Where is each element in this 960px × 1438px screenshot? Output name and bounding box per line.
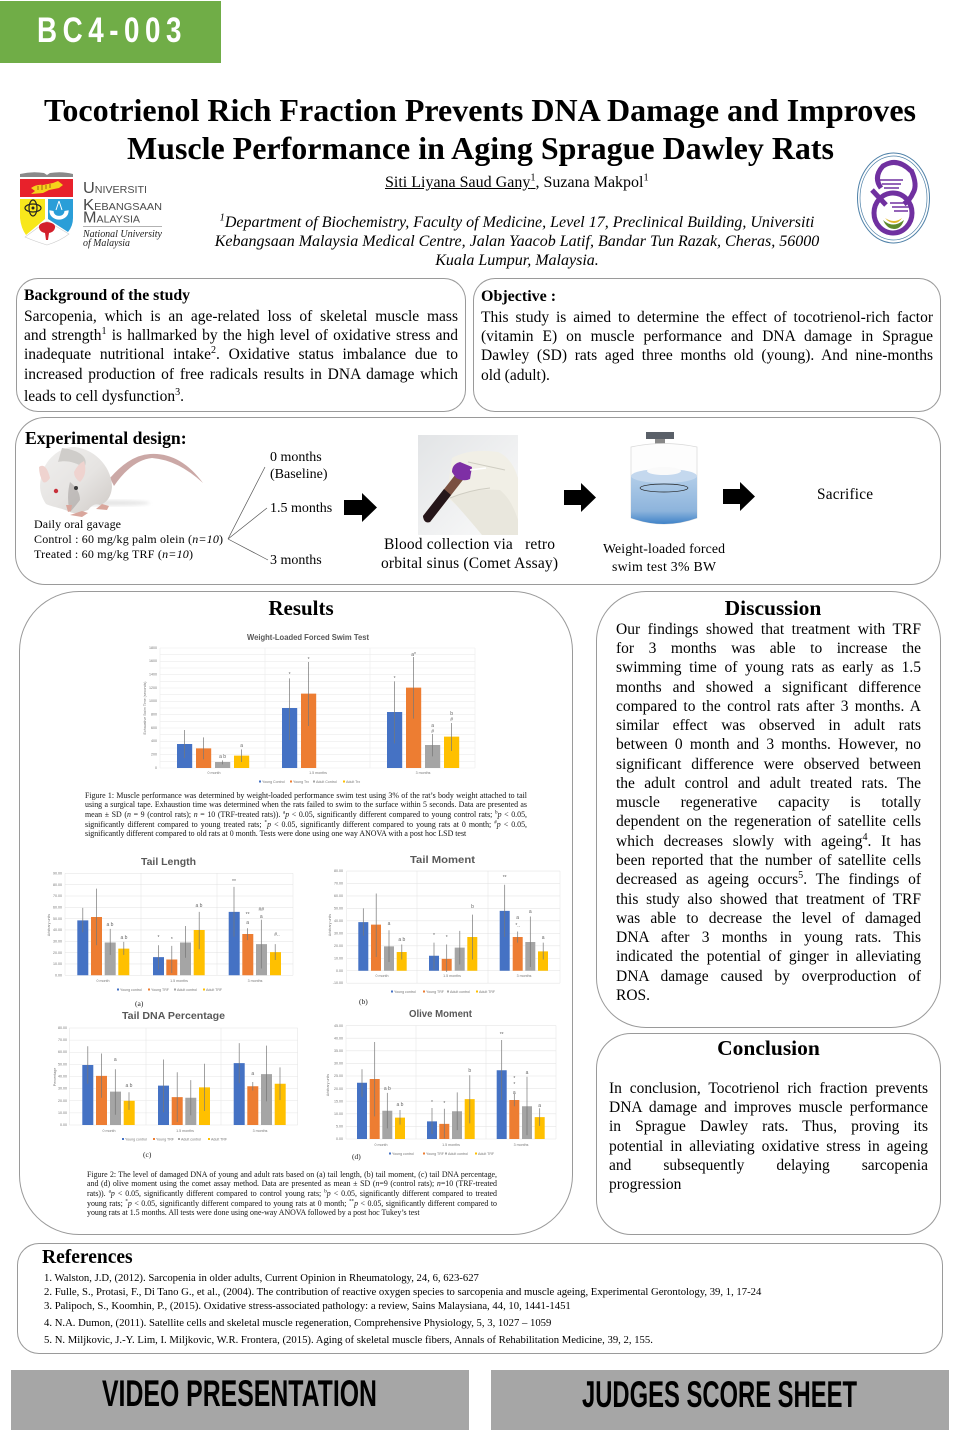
bar chart: tail moment: Tail Moment (410, 854, 476, 866)
bar chart: tail length: Young TRF (151, 988, 170, 992)
bar chart: weight-loaded forced swim test: * (394, 676, 396, 682)
bar chart: tail length: a b (196, 903, 203, 909)
bar chart: tail moment: a b (398, 937, 405, 943)
text: blood collection caption (381, 536, 558, 572)
bar chart: olive moment: a (513, 1090, 516, 1096)
text: discussion paragraph: dependent on the regeneration of satellite cells (616, 813, 921, 830)
text: background paragraph: Sarcopenia, which is an age-related loss of skeletal muscle mass (24, 308, 458, 325)
text: conclusion paragraph: In conclusion, Tocotrienol rich fraction prevents (609, 1080, 928, 1097)
text: conclusion paragraph: progression (609, 1176, 681, 1193)
bar chart: weight-loaded forced swim test: Young Control (262, 780, 285, 784)
panel: conclusion (596, 1033, 941, 1235)
heading: conclusion: Conclusion (717, 1036, 820, 1060)
text: discussion paragraph: for 3 months was able to increase the (616, 640, 921, 657)
icon: white rat (39, 447, 203, 517)
text: conclusion paragraph: DNA damage and improves muscle performance (609, 1099, 928, 1116)
logo: society emblem (857, 152, 930, 244)
bar chart: tail length: 3 months (248, 979, 263, 983)
text: discussion paragraph: DNA after 3 months in young rats. This (616, 929, 921, 946)
bar chart: tail moment: -10.00 (333, 981, 343, 985)
image: blood collection tube in gloved hand (418, 435, 518, 535)
bar chart: olive moment: 5.00 (336, 1124, 343, 1128)
panel: experimental design (15, 417, 941, 585)
bar chart: olive moment: * (443, 1101, 445, 1107)
text: gavage groups (34, 517, 223, 561)
text: objective paragraph: (vitamin E) on muscle performance and DNA damage in Sprague (481, 328, 933, 345)
button: video presentation (11, 1370, 469, 1430)
text: discussion paragraph: was able to decrease the level of damaged (616, 910, 921, 927)
bar chart: tail moment: (b) (359, 997, 368, 1006)
bar chart: olive moment: * (513, 1076, 515, 1082)
text: time points (270, 450, 332, 568)
bar chart: tail moment: a (516, 915, 519, 921)
bar chart: weight-loaded forced swim test: Adult Control (316, 780, 337, 784)
bar chart: weight-loaded forced swim test: 600 (151, 726, 157, 730)
arrow 2 (564, 483, 596, 512)
bar chart: tail length: Tail Length (141, 856, 196, 868)
caption: figure 1: significantly different compared to young treated rats; *p < 0.05, significantly different compared to young rats at 0 month; #p < 0.05, (85, 819, 527, 829)
bar chart: olive moment: 15.00 (334, 1100, 343, 1104)
bar chart: olive moment: a b (384, 1086, 391, 1092)
bar chart: olive moment: a (526, 1070, 529, 1076)
bar chart: tail moment: Arbitrary units (328, 914, 332, 936)
bar chart: tail DNA percentage: Young control (125, 1138, 147, 1142)
bar chart: weight-loaded forced swim test: a (431, 723, 434, 729)
text: background paragraph: and strength1 is hallmarked by the high level of oxidative stress and (24, 326, 458, 344)
caption: figure 2: young rats at 1.5 months. All tests were done using one-way ANOVA followed by a post hoc Tukey’s test (87, 1208, 420, 1217)
caption: figure 2 (87, 1170, 497, 1217)
bar chart: weight-loaded forced swim test (143, 632, 475, 784)
text: discussion paragraph: ROS. (616, 987, 650, 1004)
bar chart: tail moment: 60.00 (334, 894, 343, 898)
reference 4: 4. N.A. Dumon, (2011). Satellite cells and skeletal muscle regeneration, Comprehensive Physiology, 5, 3, 1027 – 1059 (44, 1316, 551, 1328)
bar chart: weight-loaded forced swim test: Exhaustive Swim Time (seconds) (143, 682, 147, 734)
bar chart: tail moment: 1.5 months (443, 974, 461, 978)
bar chart: tail moment: *.. (515, 923, 520, 929)
bar chart: olive moment: a b (397, 1102, 404, 1108)
bar chart: weight-loaded forced swim test: b (450, 711, 453, 717)
bar chart: tail moment: 50.00 (334, 906, 343, 910)
caption: figure 1: mean ± SD (n = 9 (control rats); n = 10 (TRF-treated rats)). ap < 0.05, significantly different compared to young control rats; bp < 0.05, (85, 809, 527, 819)
text: discussion paragraph: which decreases slowly with ageing4. It has (616, 832, 921, 850)
bar chart: tail length: a b (121, 935, 128, 941)
bar chart: tail length: ** (232, 879, 236, 885)
logo: Universiti Kebangsaan Malaysia: KEBANGSAAN (83, 197, 162, 214)
bar chart: tail DNA percentage: 30.00 (58, 1086, 67, 1090)
bar chart: tail moment: 0 month (376, 974, 388, 978)
bar chart: olive moment: Young control (392, 1152, 414, 1156)
title: Tocotrienol Rich Fraction Prevents DNA Damage and Improves (44, 92, 916, 128)
caption: figure 2: rats)). ap < 0.05, significantly different compared to control young rats; bp < 0.05, significantly different compared to treated (87, 1188, 497, 1198)
affiliation: Kuala Lumpur, Malaysia. (435, 252, 599, 269)
text: blood collection caption: orbital sinus (Comet Assay) (381, 555, 558, 572)
panel: objective (473, 278, 941, 412)
caption: figure 1 (85, 791, 527, 838)
bar chart: olive moment: Adult TRF (478, 1152, 495, 1156)
bar chart: tail length: 0 month (96, 979, 110, 983)
bar chart: tail length: * (171, 937, 173, 943)
bar chart: tail DNA percentage: 70.00 (58, 1038, 67, 1042)
heading: results: Results (268, 596, 334, 620)
text: time points: 0 months (270, 450, 322, 465)
bar chart: weight-loaded forced swim test: 1400 (149, 672, 157, 676)
title (44, 92, 916, 166)
bar chart: weight-loaded forced swim test: 1200 (149, 686, 157, 690)
bar chart: tail DNA percentage: 40.00 (58, 1074, 67, 1078)
bar chart: tail length: 60.00 (53, 906, 62, 910)
caption: figure 2: Figure 2: The level of damaged DNA of young and adult rats based on (a) tail length, (b) tail moment, (c) tail DNA percentage, (87, 1170, 497, 1179)
caption: figure 1: using a surgical tape. Exhaustion time was determined when the rats failed to swim to the surface within 5 seconds. Data are presented as (85, 800, 527, 809)
bar chart: tail DNA percentage: Percentage (53, 1068, 57, 1086)
panel: references (17, 1243, 943, 1354)
bar chart: tail DNA percentage: Tail DNA Percentage (122, 1010, 225, 1022)
bar chart: tail DNA percentage: 20.00 (58, 1099, 67, 1103)
bar chart: olive moment: ** (500, 1032, 504, 1038)
logo: Universiti Kebangsaan Malaysia: National University (82, 229, 163, 240)
logo: Universiti Kebangsaan Malaysia: UNIVERSITI (83, 180, 147, 197)
bar chart: tail length: 30.00 (53, 940, 62, 944)
bar chart: olive moment: Young TRF (426, 1152, 445, 1156)
text: discussion paragraph: the adult control and adult treated rats. The (616, 775, 921, 792)
bar chart: weight-loaded forced swim test: a* (411, 652, 416, 658)
title: Muscle Performance in Aging Sprague Dawley Rats (127, 130, 834, 166)
text: swim test caption (603, 541, 725, 574)
bar chart: olive moment: 3 months (514, 1143, 529, 1147)
affiliation: 1Department of Biochemistry, Faculty of Medicine, Level 17, Preclinical Building, Universiti (220, 213, 814, 231)
text: sacrifice: Sacrifice (817, 486, 873, 503)
heading: background: Background of the study (24, 287, 190, 304)
bar chart: olive moment: 0.00 (336, 1137, 343, 1141)
bar chart: tail moment: 3 months (517, 974, 532, 978)
bar chart: weight-loaded forced swim test: * (289, 672, 291, 678)
bar chart: weight-loaded forced swim test: 400 (151, 739, 157, 743)
bar chart: weight-loaded forced swim test: Weight-Loaded Forced Swim Test (247, 632, 369, 642)
bar chart: tail moment: a (388, 921, 391, 927)
bar chart: weight-loaded forced swim test: 1000 (149, 699, 157, 703)
reference 2: 2. Fulle, S., Protasi, F., Di Tano G., et al., (2004). The contribution of reactive oxygen species to sarcopenia and muscle ageing, Experimental Gerontology, 39, 1, 17-24 (44, 1286, 761, 1298)
bar chart: tail moment: * (433, 933, 435, 939)
bar chart: olive moment: (d) (352, 1152, 361, 1161)
bar chart: tail length: (a) (135, 999, 144, 1008)
bar chart: tail moment: 30.00 (334, 932, 343, 936)
logo: Universiti Kebangsaan Malaysia: of Malaysia (83, 238, 130, 249)
bar chart: tail DNA percentage: a (114, 1057, 117, 1063)
text: background paragraph: inadequate nutritional intake2. Oxidative status imbalance due to (24, 345, 458, 363)
affiliation: Kebangsaan Malaysia Medical Centre, Jalan Yaacob Latif, Bandar Tun Razak, Cheras, 56000 (215, 233, 819, 250)
bar chart: weight-loaded forced swim test: 800 (151, 712, 157, 716)
bar chart: tail moment: b (471, 904, 474, 910)
text: conclusion paragraph: and subsequently delaying sarcopenia (609, 1157, 928, 1174)
text: blood collection caption: Blood collection via retro (384, 536, 555, 553)
text: discussion paragraph: Our findings showed that treatment with TRF (616, 621, 921, 638)
reference 5: 5. N. Miljkovic, J.-Y. Lim, I. Miljkovic, W.R. Frontera, (2015). Aging of skeletal muscle fibers, Annals of Rehabilitation Medicine, 39, 2, 155. (44, 1334, 653, 1346)
text: discussion paragraph: DNA damage caused by overproduction of (616, 968, 921, 985)
bar chart: tail length: 10.00 (53, 962, 62, 966)
bar chart: olive moment: 25.00 (334, 1074, 343, 1078)
bar chart: tail length: a (260, 914, 263, 920)
bar chart: tail moment: Young control (394, 990, 416, 994)
text: discussion paragraph: similar effect was observed in adult rats (616, 717, 921, 734)
text: swim test caption: swim test 3% BW (612, 559, 716, 574)
panel: discussion (596, 591, 941, 1028)
bar chart: olive moment: 1.5 months (442, 1143, 460, 1147)
bar chart: tail DNA percentage: 80.00 (58, 1026, 67, 1030)
button: judges score sheet (491, 1370, 949, 1430)
logo: Universiti Kebangsaan Malaysia: MALAYSIA (83, 210, 140, 226)
bar chart: tail moment: Adult TRF (479, 990, 496, 994)
affiliation (214, 213, 820, 269)
text: discussion paragraph: compared to the control rats after 3 months. A (616, 698, 921, 715)
text: discussion paragraph: this study also showed that treatment of TRF (616, 891, 921, 908)
bar chart: weight-loaded forced swim test: 1.5 months (309, 771, 327, 775)
heading: objective: Objective : (481, 288, 556, 305)
bar chart: tail length: Young control (120, 988, 142, 992)
bar chart: tail length: a (246, 920, 249, 926)
bar chart: tail DNA percentage: 50.00 (58, 1062, 67, 1066)
bar chart: weight-loaded forced swim test: 1800 (149, 646, 157, 650)
bar chart: tail length: 90.00 (53, 872, 62, 876)
text: swim test caption: Weight-loaded forced (603, 541, 725, 556)
bar chart: weight-loaded forced swim test: # (431, 729, 434, 735)
results charts canvas (47, 632, 560, 1161)
bar chart: tail length: 0.00 (55, 974, 62, 978)
panel: background of the study (16, 278, 466, 412)
text: time points: 3 months (270, 553, 322, 568)
bar chart: olive moment: 30.00 (334, 1062, 343, 1066)
badge: poster code BC4-003 (0, 1, 221, 63)
bar chart: tail length: ## (259, 907, 264, 913)
bar chart: tail DNA percentage: a (251, 1071, 254, 1077)
bar chart: tail DNA percentage: 1.5 months (176, 1129, 194, 1133)
text: discussion paragraph: muscle regenerative capacity is totally (616, 794, 921, 811)
bar chart: olive moment: b (468, 1068, 471, 1074)
text: objective paragraph (481, 309, 933, 384)
bar chart: tail DNA percentage: (c) (143, 1150, 152, 1159)
text: background paragraph: leads to cell dysfunction3. (24, 387, 184, 405)
bar chart: tail length: 50.00 (53, 917, 62, 921)
bar chart: weight-loaded forced swim test: 1600 (149, 659, 157, 663)
bar chart: olive moment: 45.00 (334, 1024, 343, 1028)
bar chart: tail length: Adult control (177, 988, 197, 992)
bar chart: tail length: ** (246, 912, 250, 918)
arrow 1 (344, 493, 377, 522)
bar chart: tail length: Adult TRF (206, 988, 223, 992)
bar chart: tail moment: 20.00 (334, 944, 343, 948)
logo: Universiti Kebangsaan Malaysia (20, 172, 163, 249)
bar chart: olive moment: a (538, 1103, 541, 1109)
bar chart: tail moment: 70.00 (334, 882, 343, 886)
bar chart: tail DNA percentage: 3 months (253, 1129, 268, 1133)
bar chart: weight-loaded forced swim test: 0 (155, 766, 157, 770)
arrow 3 (723, 482, 755, 511)
text: discussion paragraph: significant difference were observed between (616, 756, 921, 773)
text: conclusion paragraph: potential in alleviating oxidative stress in ageing (609, 1138, 928, 1155)
caption: figure 2: and (d) olive moment using the comet assay method. Data are presented as mean ± SD (n=9 (control rats); n=10 (TRF-treated (87, 1179, 497, 1188)
bar chart: weight-loaded forced swim test: a b (219, 754, 226, 760)
bar chart: tail moment: a (529, 909, 532, 915)
text: objective paragraph: This study is aimed to determine the effect of tocotrienol-rich factor (481, 309, 933, 326)
bar chart: tail moment: 10.00 (334, 956, 343, 960)
bar chart: tail moment: 0.00 (336, 969, 343, 973)
bar chart: tail DNA percentage: Adult TRF (211, 1138, 228, 1142)
bar chart: tail DNA percentage: Adult control (181, 1138, 201, 1142)
bar chart: olive moment: * (431, 1100, 433, 1106)
text: objective paragraph: Dawley (SD) rats aged three months old (young). And nine-months (481, 347, 933, 364)
bar chart: tail length: 1.5 months (170, 979, 188, 983)
panel: results (19, 591, 573, 1235)
reference 1: 1. Walston, J.D, (2012). Sarcopenia in older adults, Current Opinion in Rheumatology, 24, 6, 623-627 (44, 1272, 479, 1284)
text: discussion paragraph: indicated the potential of ginger in alleviating (616, 948, 921, 965)
caption: figure 1: significantly different compared to old rats at 0 month. Tests were done using one way ANOVA with a post hoc LSD test (85, 829, 466, 838)
heading: discussion: Discussion (725, 596, 821, 620)
bar chart: weight-loaded forced swim test: 0 month (208, 771, 220, 775)
bar chart: olive moment: 35.00 (334, 1049, 343, 1053)
bar chart: weight-loaded forced swim test: * (308, 657, 310, 663)
bar chart: tail DNA percentage: a b (126, 1083, 133, 1089)
text: conclusion paragraph (609, 1080, 928, 1193)
bar chart: tail moment: 80.00 (334, 869, 343, 873)
bar chart: olive moment: Arbitrary units (326, 1074, 330, 1096)
text: background paragraph (24, 308, 458, 405)
text: gavage groups: Treated : 60 mg/kg TRF (n=10) (34, 547, 193, 561)
text: conclusion paragraph: in Sprague Dawley rats. Thus, proving its (609, 1118, 928, 1135)
text: gavage groups: Daily oral gavage (34, 517, 121, 531)
bar chart: tail length: Arbitrary units (47, 914, 51, 936)
text: discussion paragraph (616, 621, 922, 1004)
bar chart: weight-loaded forced swim test: Adult Trx (346, 780, 360, 784)
bar chart: tail length: 70.00 (53, 894, 62, 898)
bar chart: tail moment: Young TRF (426, 990, 445, 994)
caption: figure 1: Figure 1: Muscle performance was determined by weight-loaded performance swim test using 3% of the rat’s body weight attached to tail (85, 791, 527, 800)
reference 3: 3. Palipoch, S., Koomhin, P., (2015). Oxidative stress-associated pathology: a review, Sains Malaysiana, 44, 10, 1441-1451 (44, 1300, 571, 1312)
branching time-point lines (228, 467, 268, 560)
bar chart: tail length: #.. (274, 932, 280, 938)
bar chart: weight-loaded forced swim test: a (240, 743, 243, 749)
bar chart: tail length: * (158, 935, 160, 941)
bar chart: tail length: 20.00 (53, 951, 62, 955)
bar chart: tail DNA percentage (53, 1010, 298, 1159)
badge: poster code BC4-003: BC4-003 (37, 11, 187, 50)
bar chart: olive moment: 40.00 (334, 1036, 343, 1040)
bar chart: olive moment: 20.00 (334, 1087, 343, 1091)
bar chart: tail moment: a (542, 935, 545, 941)
bar chart: tail moment: * (446, 935, 448, 941)
text: background paragraph: increased production of free radicals results in DNA damage which (24, 366, 458, 383)
bar chart: weight-loaded forced swim test: 3 months (416, 771, 431, 775)
bar chart: tail DNA percentage: 0.00 (60, 1123, 67, 1127)
authors: Siti Liyana Saud Gany1, Suzana Makpol1 (385, 173, 649, 191)
bar chart: tail DNA percentage: 60.00 (58, 1050, 67, 1054)
text: discussion paragraph: months and showed a significant difference (616, 679, 921, 696)
bar chart: olive moment: Adult control (448, 1152, 468, 1156)
text: gavage groups: Control : 60 mg/kg palm olein (n=10) (34, 532, 223, 546)
heading: references: References (42, 1247, 133, 1268)
text: discussion paragraph: decreased as ageing occurs5. The findings of (616, 870, 921, 888)
bar chart: olive moment: Olive Moment (409, 1008, 472, 1020)
bar chart: olive moment: * (513, 1082, 515, 1088)
bar chart: tail moment: Adult control (450, 990, 470, 994)
bar chart: tail length: a b (107, 922, 114, 928)
heading: experimental design: Experimental design: (25, 428, 187, 448)
bar chart: tail length: 40.00 (53, 928, 62, 932)
bar chart: tail DNA percentage: Young TRF (156, 1138, 175, 1142)
text: discussion paragraph: been reported that the number of satellite cells (616, 852, 921, 869)
bar chart: tail moment: ** (503, 875, 507, 881)
bar chart: weight-loaded forced swim test: # (450, 717, 453, 723)
bar chart: tail length (47, 856, 293, 1008)
bar chart: tail DNA percentage: 10.00 (58, 1111, 67, 1115)
bar chart: weight-loaded forced swim test: Young Trx (293, 780, 309, 784)
bar chart: tail DNA percentage: 0 month (102, 1129, 116, 1133)
bar chart: tail moment: 40.00 (334, 919, 343, 923)
bar chart: weight-loaded forced swim test: 200 (151, 752, 157, 756)
text: time points: (Baseline) (270, 467, 328, 482)
icon: swim test cylinder (631, 432, 697, 524)
bar chart: tail length: 80.00 (53, 883, 62, 887)
experimental flow canvas (34, 432, 873, 574)
caption: figure 2: young rats; *p < 0.05, significantly different compared to young rats at 0 month; **p < 0.05, significantly different compared to (87, 1198, 497, 1208)
text: objective paragraph: old (adult). (481, 367, 550, 384)
text: time points: 1.5 months (270, 501, 332, 516)
bar chart: tail moment (328, 854, 560, 1006)
text: discussion paragraph: swimming time of young rats as early as 1.5 (616, 659, 921, 676)
bar chart: olive moment: 10.00 (334, 1112, 343, 1116)
bar chart: olive moment: 0 month (374, 1143, 388, 1147)
text: discussion paragraph: between 0 month and 3 months. However, no (616, 736, 921, 753)
bar chart: olive moment (326, 1008, 556, 1161)
